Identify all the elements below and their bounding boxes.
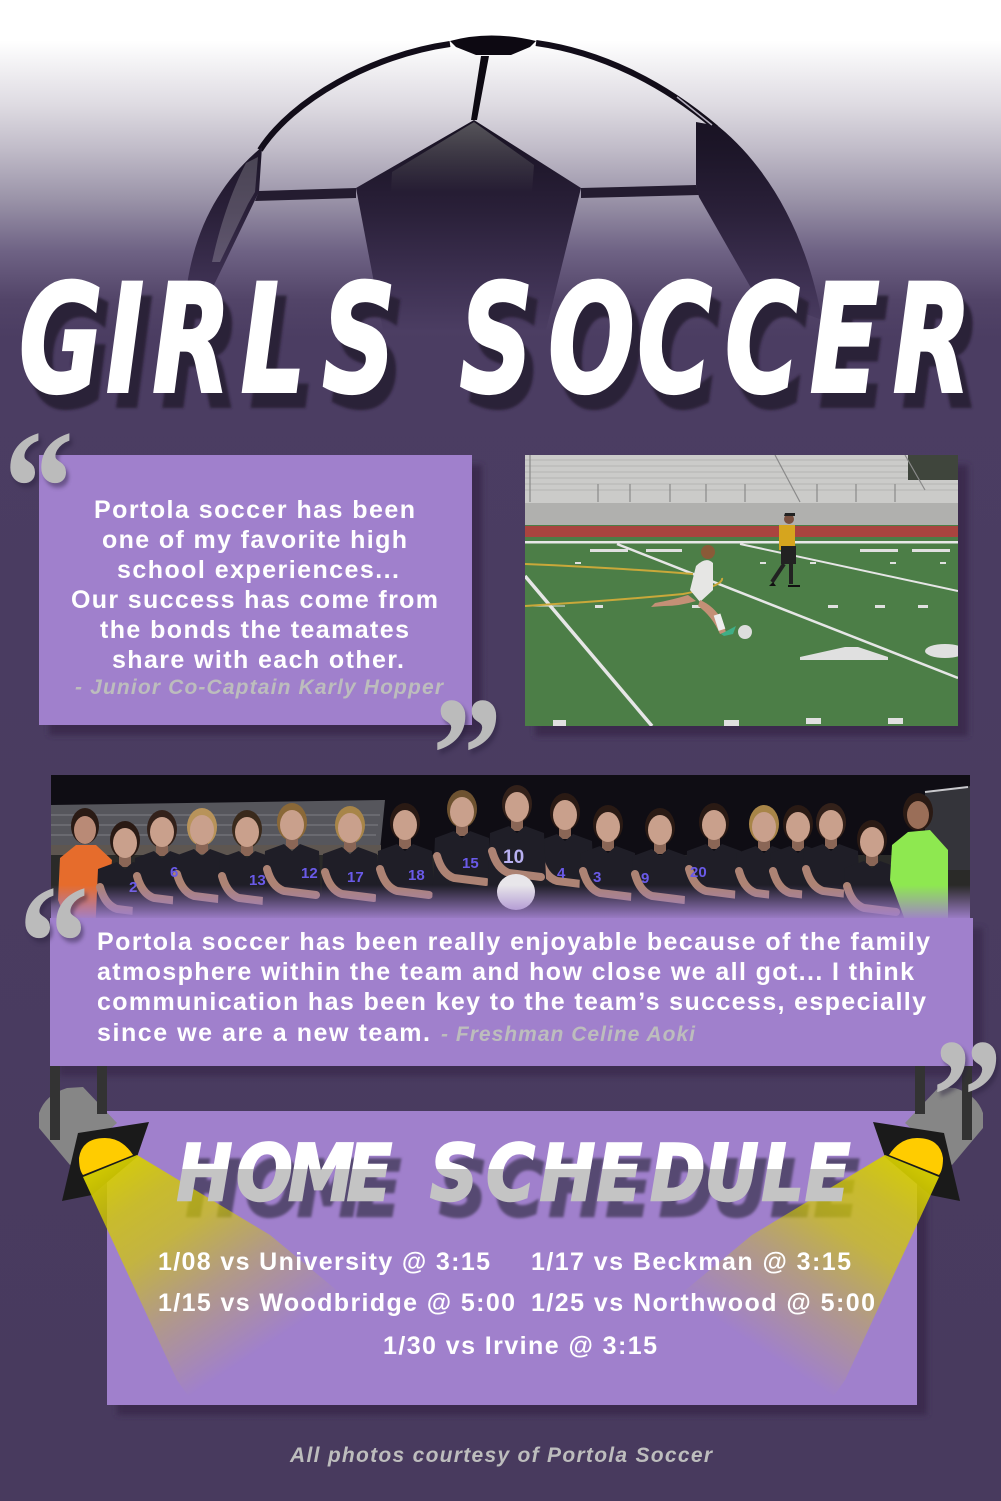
quote 1 text: school experiences... [117, 556, 399, 584]
icon: left spotlight [39, 1066, 340, 1403]
jersey numbers: 10 [503, 847, 524, 868]
jersey numbers: 9 [641, 870, 649, 887]
icon: opening quote mark 1: “ [4, 397, 74, 580]
jersey numbers: 3 [593, 869, 601, 886]
schedule list [158, 1248, 875, 1360]
jersey numbers [130, 850, 706, 892]
referee [769, 513, 800, 587]
photo: kicker on field [525, 455, 968, 736]
photo credit: All photos courtesy of Portola Soccer [289, 1444, 714, 1467]
quote 2 text: since we are a new team. [97, 1019, 430, 1047]
title shadow: GIRLS SOCCER [28, 269, 980, 443]
quote 1 text [71, 496, 438, 674]
match ball [497, 874, 535, 910]
quote 2 attribution: - Freshman Celine Aoki [441, 1023, 696, 1046]
quote 2 text: communication has been key to the team’s success, especially [97, 988, 926, 1016]
quote 1 text: share with each other. [112, 646, 404, 674]
panel: home schedule [107, 1111, 927, 1415]
quote 1 text: Our success has come from [71, 586, 438, 614]
schedule list: 1/15 vs Woodbridge @ 5:00 [158, 1289, 515, 1317]
quote 1 text: one of my favorite high [102, 526, 407, 554]
kicker [651, 545, 752, 639]
title: GIRLS SOCCER: GIRLS SOCCER [19, 254, 971, 428]
home schedule heading: HOME SCHEDULE [177, 1129, 850, 1219]
schedule list: 1/08 vs University @ 3:15 [158, 1248, 490, 1276]
jersey numbers: 12 [301, 865, 318, 882]
photo: team portrait [51, 775, 970, 918]
quote 1 text: Portola soccer has been [94, 496, 415, 524]
panel: quote 2 [50, 918, 983, 1076]
jersey numbers: 2 [129, 879, 137, 896]
schedule list: 1/17 vs Beckman @ 3:15 [531, 1248, 851, 1276]
schedule list: 1/25 vs Northwood @ 5:00 [531, 1289, 875, 1317]
jersey numbers: 4 [557, 865, 566, 882]
jersey numbers: 17 [347, 869, 364, 886]
jersey numbers: 18 [408, 867, 425, 884]
icon: closing quote mark 1: ” [432, 664, 502, 847]
goalkeeper in orange [58, 808, 112, 920]
home schedule heading shadow: HOME SCHEDULE [186, 1145, 859, 1235]
goalkeeper in green [890, 793, 948, 920]
schedule list: 1/30 vs Irvine @ 3:15 [383, 1332, 657, 1360]
panel: quote 1 [39, 455, 482, 735]
front row of players [96, 785, 900, 918]
jersey numbers: 6 [170, 864, 178, 881]
icon: opening quote mark 2: “ [18, 852, 89, 1035]
quote 2 text: Portola soccer has been really enjoyable because of the family [97, 928, 930, 956]
quote 1 attribution: - Junior Co-Captain Karly Hopper [75, 676, 445, 699]
jersey numbers: 20 [690, 864, 707, 881]
jersey numbers: 13 [249, 872, 266, 889]
icon: soccer ball [187, 36, 822, 330]
jersey numbers: 15 [462, 855, 479, 872]
quote 1 text: the bonds the teamates [100, 616, 409, 644]
quote 2 text [97, 928, 930, 1047]
icon: closing quote mark 2: ” [932, 1006, 1001, 1189]
icon: right spotlight [682, 1066, 983, 1403]
quote 2 text: atmosphere within the team and how close we all got... I think [97, 958, 914, 986]
